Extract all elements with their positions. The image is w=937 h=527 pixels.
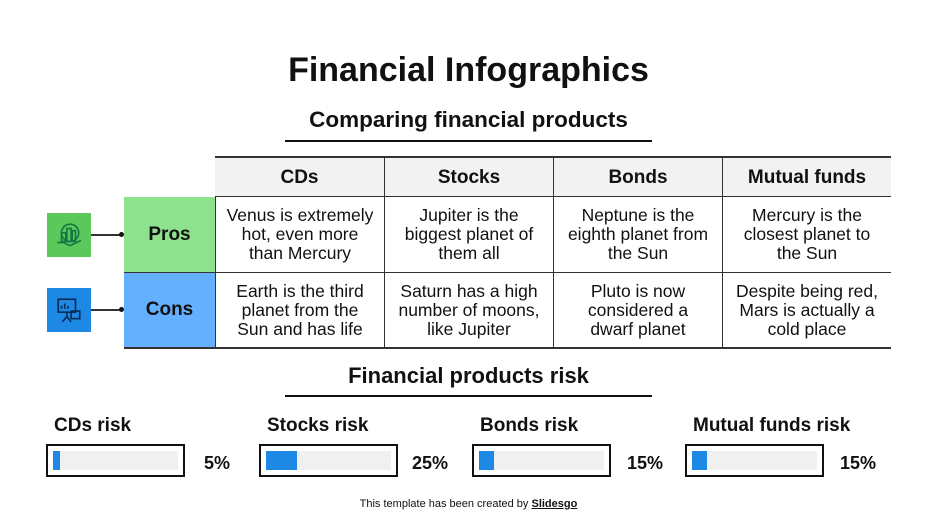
pros label xyxy=(124,197,215,272)
subtitle: comparing: Comparing financial products xyxy=(309,107,628,132)
risk: Stocks: Stocks risk xyxy=(267,415,368,436)
icon: pros xyxy=(47,213,91,257)
comparison table: Stocks xyxy=(438,166,500,188)
comparison table: Mars is actually a xyxy=(739,300,875,320)
cons label: Cons xyxy=(146,299,193,320)
subtitle: risk xyxy=(285,363,652,397)
pros row: than Mercury xyxy=(249,243,351,263)
pros row: Venus is extremely xyxy=(227,205,373,225)
risk: Stocks xyxy=(259,415,448,477)
comparison table: like Jupiter xyxy=(427,318,511,338)
risk: Mutual funds: Mutual funds risk xyxy=(693,415,850,436)
footer credit: This template has been created by Slidesgo xyxy=(360,498,577,510)
comparison table: CDs xyxy=(280,166,318,188)
cons row: Earth is the third xyxy=(236,280,364,300)
header row xyxy=(215,156,891,197)
subtitle: risk: Financial products risk xyxy=(348,363,589,388)
pros label: Pros xyxy=(148,224,191,244)
pros row: hot, even more xyxy=(242,224,358,244)
cons row: planet from the xyxy=(242,300,358,320)
comparison table: Pluto is now xyxy=(591,280,685,300)
comparison table: Bonds xyxy=(608,166,668,188)
comparison table: biggest planet of xyxy=(405,224,533,244)
comparison table xyxy=(47,156,891,349)
icon: cons xyxy=(47,288,91,332)
comparison table: Mutual funds xyxy=(748,166,866,188)
comparison table: number of moons, xyxy=(398,300,540,320)
comparison table: eighth planet from xyxy=(568,224,708,244)
comparison table: the Sun xyxy=(777,243,837,263)
risk: CDs: 5% xyxy=(204,453,230,473)
comparison table: Saturn has a high xyxy=(400,280,538,300)
comparison table: dwarf planet xyxy=(590,318,686,338)
pros row xyxy=(215,197,384,272)
risk: CDs xyxy=(46,415,230,477)
comparison table: cold place xyxy=(768,318,846,338)
risk: Bonds: 15% xyxy=(627,453,663,473)
cons row xyxy=(215,273,384,347)
comparison table: Mercury is the xyxy=(752,205,862,225)
cons label xyxy=(124,273,215,347)
comparison table: the Sun xyxy=(608,243,668,263)
risk: CDs: CDs risk xyxy=(54,415,131,436)
cons row: Sun and has life xyxy=(237,318,363,338)
risk: Mutual funds xyxy=(685,415,876,477)
risk: Stocks: 25% xyxy=(412,453,448,473)
title: Financial Infographics xyxy=(288,51,649,89)
comparison table: closest planet to xyxy=(744,224,870,244)
risk: Bonds xyxy=(472,415,663,477)
comparison table: Despite being red, xyxy=(736,280,878,300)
subtitle: comparing xyxy=(285,107,652,142)
risk: Mutual funds: 15% xyxy=(840,453,876,473)
comparison table: Jupiter is the xyxy=(419,205,519,225)
comparison table: considered a xyxy=(588,300,688,320)
risk: Bonds: Bonds risk xyxy=(480,415,578,436)
comparison table: Neptune is the xyxy=(582,205,694,225)
comparison table: them all xyxy=(438,243,500,263)
